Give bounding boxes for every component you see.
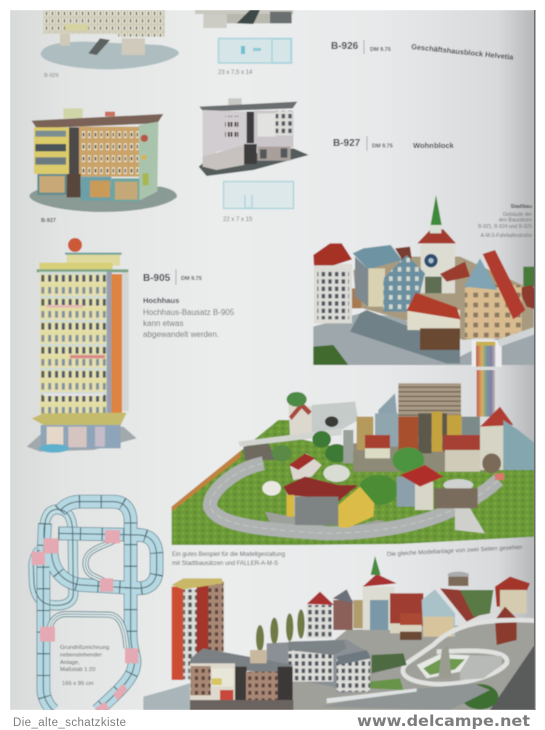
caption Stadtbau: B-921, B-924 und B-925	[478, 224, 532, 230]
model office block	[199, 98, 309, 176]
heading B-905: DM 9.75	[181, 276, 202, 282]
heading B-905	[143, 269, 202, 285]
track plan note: nebenstehender	[60, 652, 102, 658]
heading B-927: DM 9.75	[372, 144, 393, 150]
dark right edge of sheet	[534, 10, 536, 710]
caption Stadtbau: Stadtbau	[511, 204, 532, 210]
description Hochhaus: kann etwas	[143, 319, 183, 328]
watermark left: Die_alte_schatzkiste	[13, 717, 126, 729]
label B-926 small: B-926	[44, 73, 59, 79]
caption right layout photo: Die gleiche Modellanlage von zwei Seiten gesehen	[387, 545, 522, 558]
heading B-905: B-905	[143, 273, 171, 284]
track plan note	[60, 645, 109, 687]
heading B-927: Wohnblock	[413, 141, 455, 150]
model B-905 tower block	[27, 238, 137, 453]
model B-926 commercial block	[41, 10, 179, 69]
heading B-926: Geschäftshausblock Helvetia	[411, 42, 515, 62]
caption Stadtbau: den Bausätzen	[499, 218, 532, 224]
caption left layout photo	[172, 552, 285, 567]
size label 22 x 7 x 15: 22 x 7 x 15	[223, 217, 253, 223]
track plan note: Anlage,	[60, 660, 80, 666]
heading B-927	[333, 136, 455, 151]
watermark right: www.delcampe.net	[357, 712, 531, 730]
track plan diagram	[32, 502, 157, 711]
model fragment top centre	[195, 10, 293, 28]
description Hochhaus: Hochhaus-Bausatz B-905	[143, 308, 235, 317]
photo: old town scene	[313, 195, 537, 367]
caption left layout photo: mit Stadtbausätzen und FALLER-A-M-S	[172, 561, 278, 567]
caption Stadtbau: Gebäude der	[503, 212, 532, 218]
caption Stadtbau: A-M-S-Fahrbahnstraße	[481, 233, 532, 239]
heading B-926: B-926	[331, 41, 359, 52]
photo: model layout rear view	[143, 556, 537, 710]
track plan note: Maßstab 1:20	[60, 667, 95, 673]
heading B-927: B-927	[333, 138, 361, 149]
description Hochhaus: abgewandelt werden.	[143, 330, 219, 339]
heading B-926	[331, 40, 515, 62]
model B-927 residential block	[29, 108, 177, 212]
description Hochhaus	[143, 296, 235, 339]
caption Stadtbau	[478, 204, 532, 239]
size label 23 x 7,5 x 14: 23 x 7,5 x 14	[218, 70, 253, 76]
heading B-926: DM 9.75	[370, 47, 391, 53]
plan outline 22 x 7 x 15	[224, 182, 294, 208]
plan outline 23 x 7,5 x 14	[218, 38, 292, 63]
track plan note: 165 x 95 cm	[62, 681, 94, 687]
caption left layout photo: Ein gutes Beispiel für die Modellgestaltung	[172, 552, 285, 558]
label B-927 small: B-927	[41, 218, 56, 224]
photo: model layout front view	[172, 370, 535, 545]
description Hochhaus: Hochhaus	[143, 296, 179, 305]
track plan note: Grundrißzeichnung	[60, 645, 109, 651]
